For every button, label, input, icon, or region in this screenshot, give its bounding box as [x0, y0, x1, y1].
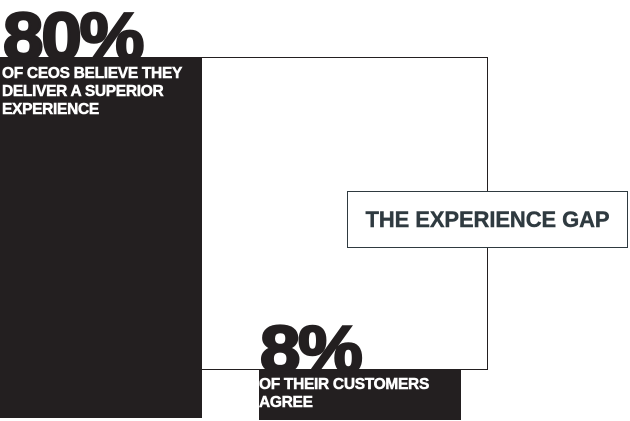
caption: CEOs: EXPERIENCE: [2, 101, 99, 118]
bar: customers 8%: [259, 369, 461, 420]
caption: CEOs: OF CEOS BELIEVE THEY: [2, 65, 182, 82]
caption: customers: [259, 376, 429, 411]
big number 80%: 80%: [3, 0, 142, 75]
caption: customers: AGREE: [259, 394, 313, 411]
label box: the experience gap: [347, 191, 628, 248]
caption: CEOs: [2, 65, 182, 118]
big number 8%: 8%: [260, 312, 361, 386]
caption: CEOs: DELIVER A SUPERIOR: [2, 83, 163, 100]
outline gap rectangle: [201, 57, 488, 370]
caption: customers: OF THEIR CUSTOMERS: [259, 376, 429, 393]
bar: CEOs 80%: [0, 57, 202, 418]
label box: the experience gap: THE EXPERIENCE GAP: [366, 206, 609, 232]
